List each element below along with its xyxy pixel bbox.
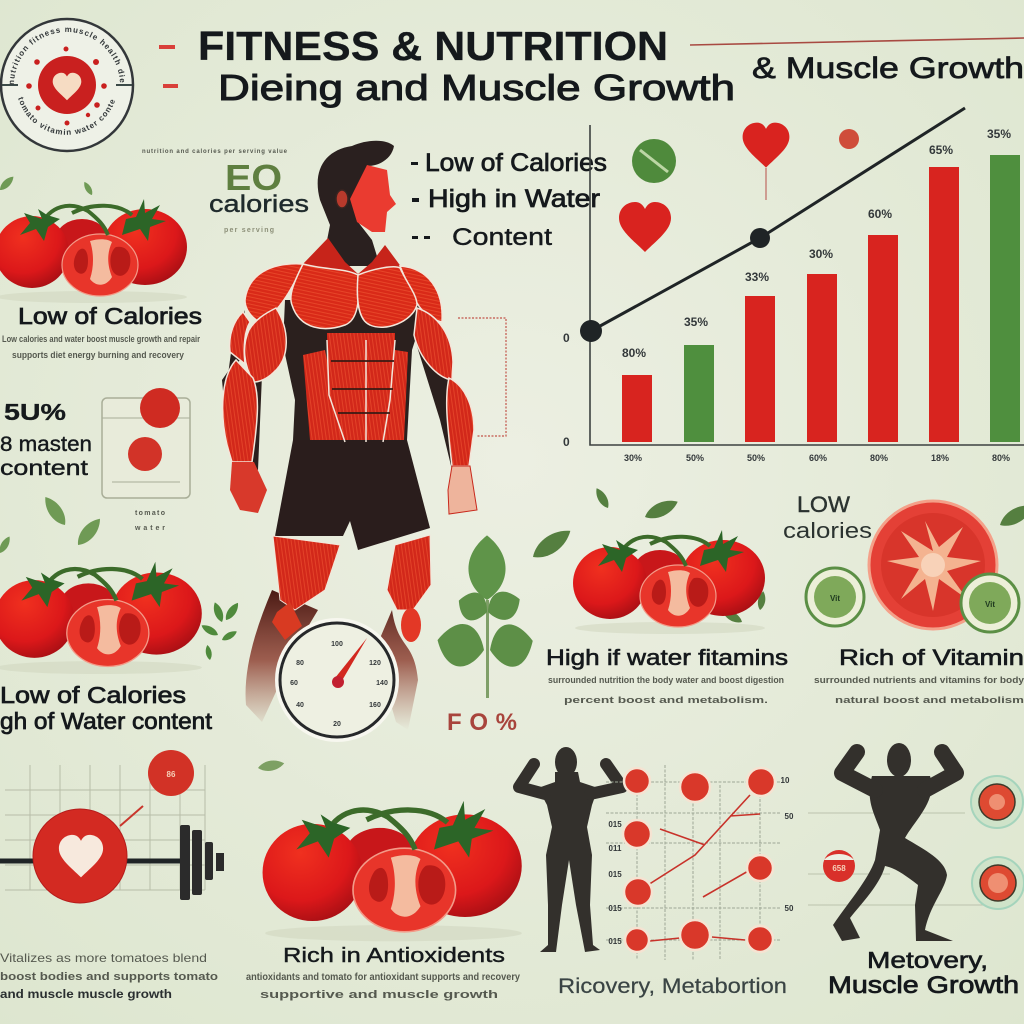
bar values: 35%: [684, 315, 708, 329]
knees: [272, 602, 302, 640]
title: FITNESS & NUTRITION: [198, 23, 668, 69]
stat: calories: EO: [225, 157, 282, 198]
ab lines: [327, 340, 395, 442]
grid: [606, 765, 780, 960]
text block: bottom left: Vitalizes as more tomatoes blend: [0, 951, 207, 965]
text block: high water: High if water fitamins: [546, 645, 788, 670]
node axis labels: 015: [608, 937, 622, 946]
stat: calories: calories: [209, 191, 309, 218]
label: low calories: calories: [783, 518, 872, 543]
deltoid right: [400, 266, 442, 322]
text block: rich of vitamin: [814, 645, 1024, 705]
x labels: 80%: [992, 453, 1010, 463]
side muscles right: [385, 350, 408, 440]
x labels: 50%: [747, 453, 765, 463]
plant: [433, 535, 537, 698]
bar values: 30%: [809, 247, 833, 261]
text block: high water: surrounded nutrition the body water and boost digestion: [548, 675, 784, 685]
tomato cluster 1: [0, 199, 187, 303]
line chart: recovery: [606, 765, 794, 960]
list: benefits: [411, 149, 607, 251]
node axis labels: 015: [608, 870, 622, 879]
icon: green slice right: Vit: [985, 600, 995, 609]
chart: barbell heart: [0, 750, 224, 903]
pectoral left: [291, 264, 359, 328]
bar values: 33%: [745, 270, 769, 284]
text block: low of calories: Low of Calories: [18, 303, 202, 329]
deltoid left: [245, 264, 303, 324]
subtitle: muscle growth: [690, 38, 1024, 85]
gauge: 100: [331, 641, 343, 648]
x labels: [624, 453, 1010, 463]
gauge: 60: [290, 680, 298, 687]
label: low calories: [783, 492, 872, 543]
gauge: 160: [369, 702, 381, 709]
triceps left: [230, 312, 250, 364]
panel: water content: [0, 388, 190, 532]
dotted bracket: [458, 318, 506, 436]
lower legs: [246, 590, 418, 730]
trapezius: [303, 238, 402, 276]
tomato slice: [869, 501, 997, 629]
gauge: 40: [296, 702, 304, 709]
title: Dieing and Muscle Growth: [218, 67, 735, 108]
x labels: 80%: [870, 453, 888, 463]
thigh left: [273, 536, 340, 610]
sprig left of gauge: [200, 601, 241, 660]
list: benefits: High in Water: [428, 185, 600, 213]
arm shadows: [222, 310, 452, 470]
torso silhouette: [283, 300, 428, 440]
muscular figure: [222, 141, 477, 730]
panel: water content: water: [134, 525, 165, 532]
x labels: 60%: [809, 453, 827, 463]
panel: water content: content: [0, 457, 88, 480]
node axis labels: 50: [785, 904, 794, 913]
text block: rich of vitamin: Rich of Vitamin: [839, 645, 1024, 670]
panel: water content: tomato: [135, 510, 165, 517]
gauge: 140: [376, 680, 388, 687]
abs: [327, 333, 395, 440]
text block: low of calories: supports diet energy burning and recovery: [12, 350, 184, 360]
icon: ring badge bottom: [972, 857, 1024, 909]
icon: red tomato chip: 658: [832, 864, 846, 873]
tomato cluster 2: [0, 562, 202, 674]
stat: calories: nutrition and calories per serving value: [142, 149, 288, 155]
icon: chart heart top: [743, 123, 789, 200]
bar values: 65%: [929, 143, 953, 157]
x labels: 30%: [624, 453, 642, 463]
tomato cluster 3: [573, 530, 765, 634]
title: [159, 23, 735, 108]
pectoral right: [357, 267, 417, 327]
subtitle: muscle growth: & Muscle Growth: [752, 52, 1024, 85]
biceps left: [245, 308, 286, 382]
node axis labels: 50: [785, 812, 794, 821]
icon: chart leaf: [632, 139, 676, 183]
red connectors: [640, 795, 760, 941]
silhouette: front flex: [519, 747, 622, 952]
icon: tomato slice small: [839, 129, 859, 149]
icon: green slice left: Vit: [830, 594, 840, 603]
leaf over cluster 4: [257, 758, 285, 773]
bar values: 60%: [868, 207, 892, 221]
leaves left: [0, 174, 105, 555]
panel: water content: 8 masten: [0, 433, 92, 456]
label: low calories: LOW: [797, 492, 850, 517]
text block: rich in antioxidents: supportive and muscle growth: [260, 989, 498, 1001]
bar values: [563, 127, 1011, 449]
thigh right: [387, 535, 431, 610]
panel: water content: 5U%: [4, 399, 66, 425]
icon: green slice right: [961, 574, 1019, 632]
bar values: 35%: [987, 127, 1011, 141]
node axis labels: 015: [608, 820, 622, 829]
text block: rich in antioxidents: Rich in Antioxidents: [283, 945, 505, 967]
forearm right: [447, 378, 474, 466]
text block: low of calories: [2, 303, 202, 360]
shorts: [275, 440, 430, 550]
text block: low of calories, water content: gh of Water content: [0, 708, 213, 734]
silhouette: lunge flex: [833, 743, 956, 941]
icon: red tomato chip: [823, 850, 855, 882]
x labels: 18%: [931, 453, 949, 463]
node axis labels: 011: [609, 844, 622, 853]
text block: bottom left: boost bodies and supports tomato: [0, 971, 218, 983]
text block: high water: percent boost and metabolism.: [564, 695, 768, 705]
x labels: 50%: [686, 453, 704, 463]
icon: chart heart left: [619, 202, 671, 252]
trend line: [591, 108, 965, 331]
bar values: 80%: [622, 346, 646, 360]
text block: low of calories: Low calories and water boost muscle growth and repair: [2, 334, 200, 344]
fists: [230, 462, 267, 513]
badge: heart medallion: [0, 18, 134, 152]
nodes: [623, 768, 775, 952]
list: benefits: Low of Calories: [425, 149, 607, 177]
bar values: 0: [563, 331, 570, 345]
gauge: 20: [333, 721, 341, 728]
node axis labels: 10: [781, 776, 790, 785]
node axis labels: [608, 776, 794, 946]
muscles: [223, 264, 474, 466]
text block: low of calories, water content: Low of Calories: [0, 682, 186, 708]
biceps right: [414, 308, 453, 380]
label: metovery muscle growth: [828, 947, 1019, 999]
text block: rich of vitamin: natural boost and metabolism: [835, 695, 1024, 705]
node axis labels: 015: [608, 904, 622, 913]
forearm left: [223, 360, 257, 462]
leaves center right: [528, 486, 1024, 626]
face: [350, 165, 396, 232]
text block: rich of vitamin: surrounded nutrients and vitamins for body: [814, 675, 1024, 685]
gauge: [277, 620, 397, 740]
text block: bottom left: and muscle muscle growth: [0, 987, 172, 1001]
text block: bottom left: [0, 951, 218, 1001]
text block: high water: [546, 645, 788, 705]
icon: ring badge top: [971, 776, 1023, 828]
bars: [622, 155, 1020, 442]
gauge: 120: [369, 660, 381, 667]
chart: barbell heart: 86: [167, 770, 176, 779]
text block: rich in antioxidents: [246, 945, 520, 1001]
label: percent: FO%: [447, 709, 517, 736]
text block: rich in antioxidents: antioxidants and tomato for antioxidant supports and recovery: [246, 972, 520, 983]
axes: [590, 125, 1024, 445]
text block: low of calories, water content: [0, 682, 213, 734]
right axis faint lines: [808, 813, 990, 905]
tomato cluster 4: [263, 801, 522, 941]
stat: calories: per serving: [224, 227, 274, 234]
list: benefits: Content: [452, 224, 552, 251]
bar values: 0: [563, 435, 570, 449]
label: metovery muscle growth: Metovery,: [867, 947, 988, 973]
gauge: 80: [296, 660, 304, 667]
label: recovery metabortion: Ricovery, Metabortion: [558, 975, 787, 998]
side muscles left: [303, 350, 343, 440]
bar chart: [563, 108, 1024, 463]
head and hair: [318, 141, 394, 266]
icon: green slice left: [806, 568, 864, 626]
label: metovery muscle growth: Muscle Growth: [828, 972, 1019, 999]
stat: calories: [142, 149, 309, 234]
